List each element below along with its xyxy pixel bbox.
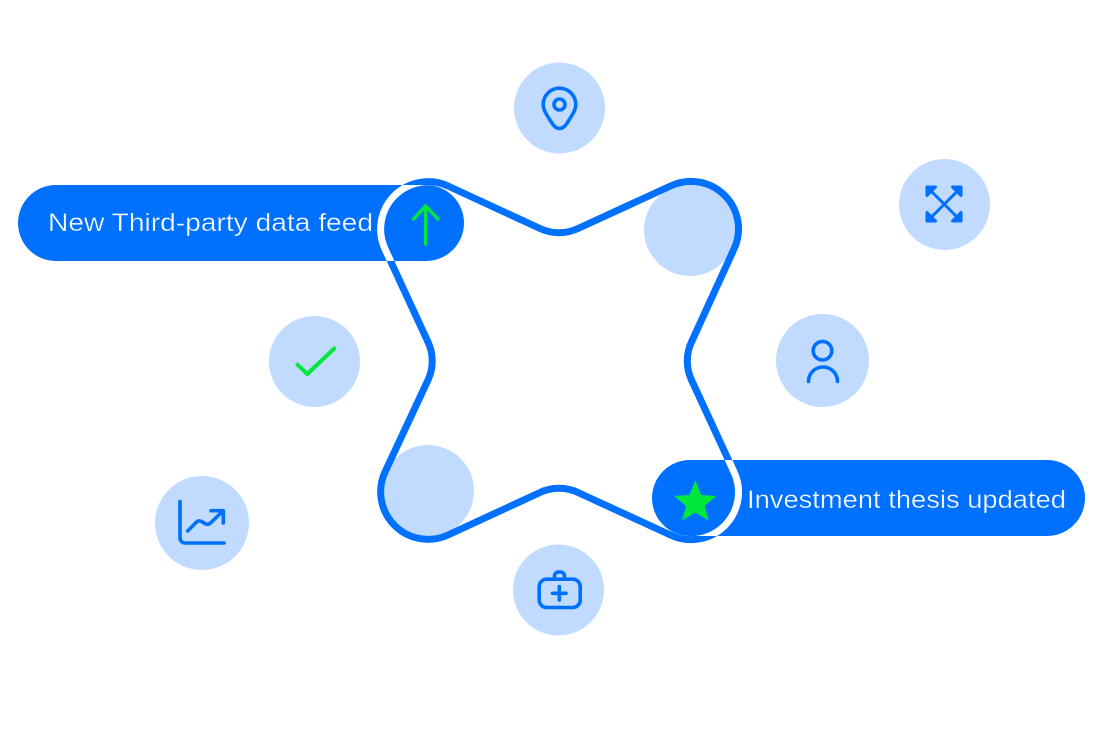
icon: person — [776, 314, 869, 407]
icon: medical case — [513, 544, 604, 636]
icon: check mark — [269, 316, 360, 407]
empty circle: top right — [644, 184, 736, 276]
infographic canvas — [18, 62, 1085, 636]
panel: left callout pill — [18, 185, 464, 261]
text: investment thesis updated: Investment thesis updated — [747, 486, 1066, 514]
central four-point outline — [381, 181, 738, 540]
empty circle: bottom left — [382, 445, 474, 537]
panel: right callout pill — [652, 460, 1085, 536]
icon: green star — [675, 482, 715, 520]
icon: location pin — [514, 62, 605, 154]
icon: expand arrows — [899, 159, 990, 250]
icon: growth chart — [155, 476, 249, 570]
icon: green up arrow — [414, 206, 438, 244]
text: new third-party data feed: New Third-party data feed — [48, 209, 373, 237]
